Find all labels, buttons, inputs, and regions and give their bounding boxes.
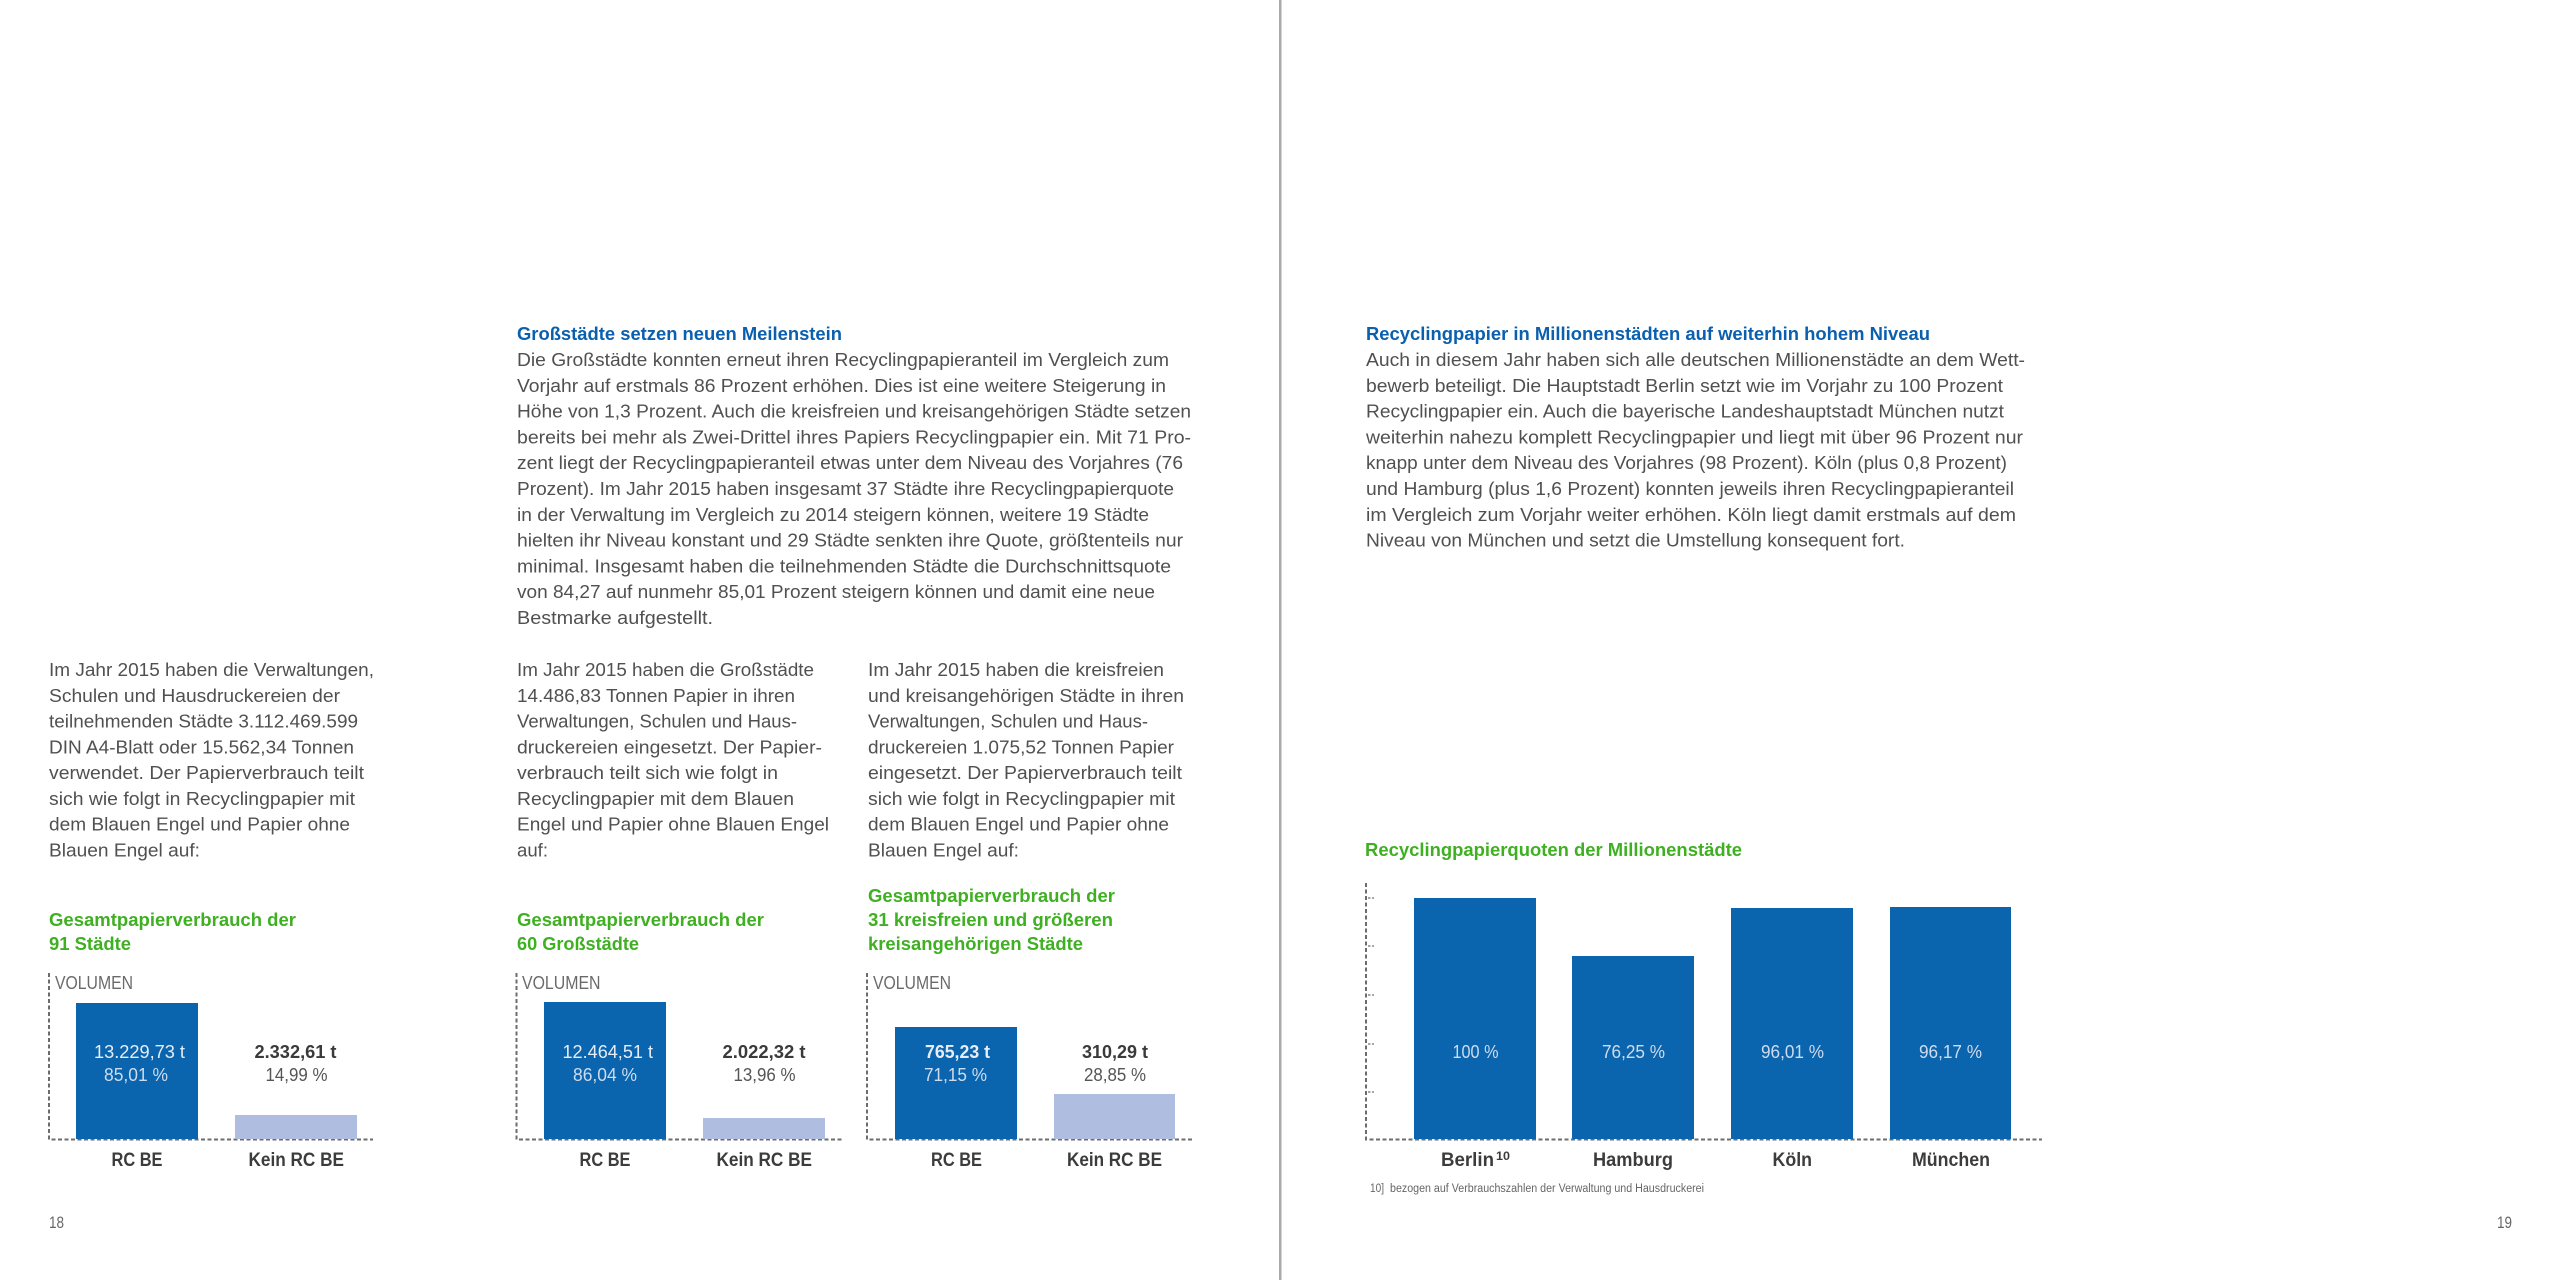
category label: Hamburg: Hamburg <box>1593 1150 1673 1171</box>
axes <box>867 973 1192 1140</box>
value: Kein RC BE percent: 28,85 % <box>1084 1065 1146 1085</box>
category label: Kein RC BE: Kein RC BE <box>716 1150 812 1171</box>
text block: district cities paper usage: dem Blauen Engel und Papier ohne <box>868 814 1169 834</box>
value: Kein RC BE tonnes: 310,29 t <box>1082 1042 1148 1062</box>
paragraph: und Hamburg (plus 1,6 Prozent) konnten jeweils ihren Recyclingpapieranteil <box>1366 478 2014 499</box>
bar chart: 91 cities <box>49 973 373 1171</box>
value: RC BE tonnes: 765,23 t <box>925 1042 990 1062</box>
value: Kein RC BE percent: 14,99 % <box>266 1065 328 1085</box>
heading: chart 31 district cities <box>868 886 1115 954</box>
text block: district cities paper usage: Im Jahr 2015 haben die kreisfreien <box>868 659 1164 680</box>
axes <box>1366 883 2042 1140</box>
category label: Kein RC BE: Kein RC BE <box>1067 1150 1162 1171</box>
heading: chart 31 district cities: Gesamtpapierverbrauch der <box>868 886 1115 906</box>
bar: Kein RC BE <box>235 1115 357 1139</box>
text block: large cities paper usage: verbrauch teilt sich wie folgt in <box>517 762 778 783</box>
text block: total paper usage intro: Schulen und Hausdruckereien der <box>49 685 340 706</box>
paragraph: weiterhin nahezu komplett Recyclingpapier und liegt mit über 96 Prozent nur <box>1365 426 2023 447</box>
category label: RC BE: RC BE <box>931 1150 982 1171</box>
axis label: VOLUMEN <box>522 973 600 993</box>
value: Kein RC BE tonnes: 2.022,32 t <box>722 1042 806 1062</box>
text block: Großstädte milestone <box>517 324 1191 628</box>
bar: München <box>1890 907 2011 1139</box>
value: München: 96,17 % <box>1919 1042 1982 1062</box>
value: RC BE percent: 85,01 % <box>104 1065 168 1085</box>
text block: total paper usage intro <box>49 659 374 860</box>
paragraph: Auch in diesem Jahr haben sich alle deutschen Millionenstädte an dem Wett- <box>1366 349 2025 370</box>
paragraph: Vorjahr auf erstmals 86 Prozent erhöhen. Dies ist eine weitere Steigerung in <box>517 375 1166 396</box>
bar: Köln <box>1731 908 1853 1139</box>
paragraph: Höhe von 1,3 Prozent. Auch die kreisfreien und kreisangehörigen Städte setzen <box>517 401 1191 422</box>
axes <box>516 973 842 1140</box>
paragraph: zent liegt der Recyclingpapieranteil etwas unter dem Niveau des Vorjahres (76 <box>517 452 1183 473</box>
text block: district cities paper usage: druckereien 1.075,52 Tonnen Papier <box>868 736 1174 757</box>
value: Kein RC BE percent: 13,96 % <box>734 1065 796 1085</box>
value: RC BE percent: 86,04 % <box>573 1065 637 1085</box>
heading: chart 91 cities: Gesamtpapierverbrauch der <box>49 910 296 930</box>
text block: large cities paper usage: Recyclingpapier mit dem Blauen <box>517 788 794 809</box>
heading: chart 60 large cities: Gesamtpapierverbrauch der <box>517 910 764 930</box>
paragraph: bewerb beteiligt. Die Hauptstadt Berlin setzt wie im Vorjahr zu 100 Prozent <box>1366 375 2003 396</box>
page number 18: 18 <box>49 1213 64 1232</box>
heading: Recyclingpapier in Millionenstädten auf weiterhin hohem Niveau <box>1366 324 1930 344</box>
page divider <box>1279 0 1282 1280</box>
category label: Kein RC BE: Kein RC BE <box>248 1150 344 1171</box>
text block: total paper usage intro: Im Jahr 2015 haben die Verwaltungen, <box>49 659 374 680</box>
axis label: VOLUMEN <box>873 973 951 993</box>
axes <box>49 973 373 1140</box>
heading: chart 60 large cities: 60 Großstädte <box>517 934 639 954</box>
text block: district cities paper usage <box>868 659 1184 860</box>
heading: chart 91 cities: 91 Städte <box>49 934 131 954</box>
value: RC BE percent: 71,15 % <box>924 1065 987 1085</box>
paragraph: Recyclingpapier ein. Auch die bayerische Landeshauptstadt München nutzt <box>1366 401 2004 422</box>
heading: chart 60 large cities <box>517 910 764 954</box>
page number 19: 19 <box>2497 1213 2512 1232</box>
bar chart: million cities recycling quotas <box>1366 883 2042 1171</box>
paragraph: minimal. Insgesamt haben die teilnehmenden Städte die Durchschnittsquote <box>517 555 1171 576</box>
bar: Kein RC BE <box>1054 1094 1175 1139</box>
text block: large cities paper usage <box>517 659 829 860</box>
paragraph: Die Großstädte konnten erneut ihren Recyclingpapieranteil im Vergleich zum <box>517 349 1169 370</box>
paragraph: Bestmarke aufgestellt. <box>517 607 713 628</box>
heading: Großstädte setzen neuen Meilenstein <box>517 324 842 344</box>
paragraph: bereits bei mehr als Zwei-Drittel ihres Papiers Recyclingpapier ein. Mit 71 Pro- <box>517 426 1191 447</box>
value: Berlin: 100 % <box>1452 1042 1498 1062</box>
text block: large cities paper usage: Engel und Papier ohne Blauen Engel <box>517 814 829 834</box>
text block: total paper usage intro: DIN A4-Blatt oder 15.562,34 Tonnen <box>49 736 354 757</box>
bar: Hamburg <box>1572 956 1694 1139</box>
bar: Kein RC BE <box>703 1118 825 1139</box>
value: RC BE tonnes: 12.464,51 t <box>562 1042 653 1062</box>
category label: Berlin: 10 <box>1496 1149 1510 1163</box>
text block: total paper usage intro: Blauen Engel auf: <box>49 839 200 860</box>
paragraph: Prozent). Im Jahr 2015 haben insgesamt 37 Städte ihre Recyclingpapierquote <box>517 478 1174 499</box>
paragraph: in der Verwaltung im Vergleich zu 2014 steigern können, weitere 19 Städte <box>517 504 1149 525</box>
paragraph: knapp unter dem Niveau des Vorjahres (98 Prozent). Köln (plus 0,8 Prozent) <box>1366 452 2007 473</box>
text block: district cities paper usage: sich wie folgt in Recyclingpapier mit <box>868 788 1175 809</box>
axis label: VOLUMEN <box>55 973 133 993</box>
paragraph: von 84,27 auf nunmehr 85,01 Prozent steigern können und damit eine neue <box>517 581 1155 602</box>
heading: chart 31 district cities: kreisangehörigen Städte <box>868 934 1083 954</box>
value: Hamburg: 76,25 % <box>1602 1042 1665 1062</box>
bar chart: 60 large cities <box>516 973 842 1171</box>
text block: total paper usage intro: teilnehmenden Städte 3.112.469.599 <box>49 710 358 732</box>
value: RC BE tonnes: 13.229,73 t <box>94 1042 185 1062</box>
text block: district cities paper usage: eingesetzt. Der Papierverbrauch teilt <box>868 762 1182 783</box>
bar: RC BE <box>544 1002 666 1139</box>
bar: Berlin <box>1414 898 1536 1139</box>
category label: RC BE: RC BE <box>112 1150 162 1171</box>
bar chart: 31 district cities <box>867 973 1192 1171</box>
text block: large cities paper usage: auf: <box>517 839 548 860</box>
text block: million cities <box>1365 324 2025 551</box>
bar: RC BE <box>895 1027 1017 1139</box>
text block: total paper usage intro: sich wie folgt in Recyclingpapier mit <box>49 788 355 809</box>
paragraph <box>1365 349 2025 551</box>
text block: total paper usage intro: dem Blauen Engel und Papier ohne <box>49 814 350 834</box>
text block: large cities paper usage: Verwaltungen, Schulen und Haus- <box>517 710 797 732</box>
paragraph: im Vergleich zum Vorjahr weiter erhöhen. Köln liegt damit erstmals auf dem <box>1366 504 2016 525</box>
text block: district cities paper usage: Blauen Engel auf: <box>868 839 1019 860</box>
bar: RC BE <box>76 1003 198 1139</box>
text block: district cities paper usage: Verwaltungen, Schulen und Haus- <box>868 710 1148 732</box>
text block: district cities paper usage: und kreisangehörigen Städte in ihren <box>868 685 1184 706</box>
category label: München: München <box>1912 1150 1990 1171</box>
category label: Berlin: Berlin <box>1441 1150 1494 1171</box>
heading: chart 91 cities <box>49 910 296 954</box>
text block: large cities paper usage: druckereien eingesetzt. Der Papier- <box>517 736 822 757</box>
category label: Köln: Köln <box>1772 1150 1812 1171</box>
paragraph <box>517 349 1191 628</box>
value: Köln: 96,01 % <box>1761 1042 1824 1062</box>
text block: large cities paper usage: 14.486,83 Tonnen Papier in ihren <box>517 685 795 706</box>
paragraph: Niveau von München und setzt die Umstellung konsequent fort. <box>1366 530 1905 551</box>
footnote: 10] <box>1370 1183 1384 1195</box>
heading: chart 31 district cities: 31 kreisfreien und größeren <box>868 910 1113 930</box>
paragraph: hielten ihr Niveau konstant und 29 Städte senkten ihre Quote, größtenteils nur <box>517 530 1183 551</box>
text block: large cities paper usage: Im Jahr 2015 haben die Großstädte <box>517 659 814 680</box>
category label: RC BE: RC BE <box>580 1150 630 1171</box>
heading: million cities chart: Recyclingpapierquoten der Millionenstädte <box>1365 840 1742 860</box>
value: Kein RC BE tonnes: 2.332,61 t <box>254 1042 337 1062</box>
footnote: bezogen auf Verbrauchszahlen der Verwaltung und Hausdruckerei <box>1390 1183 1704 1195</box>
text block: total paper usage intro: verwendet. Der Papierverbrauch teilt <box>49 762 364 783</box>
